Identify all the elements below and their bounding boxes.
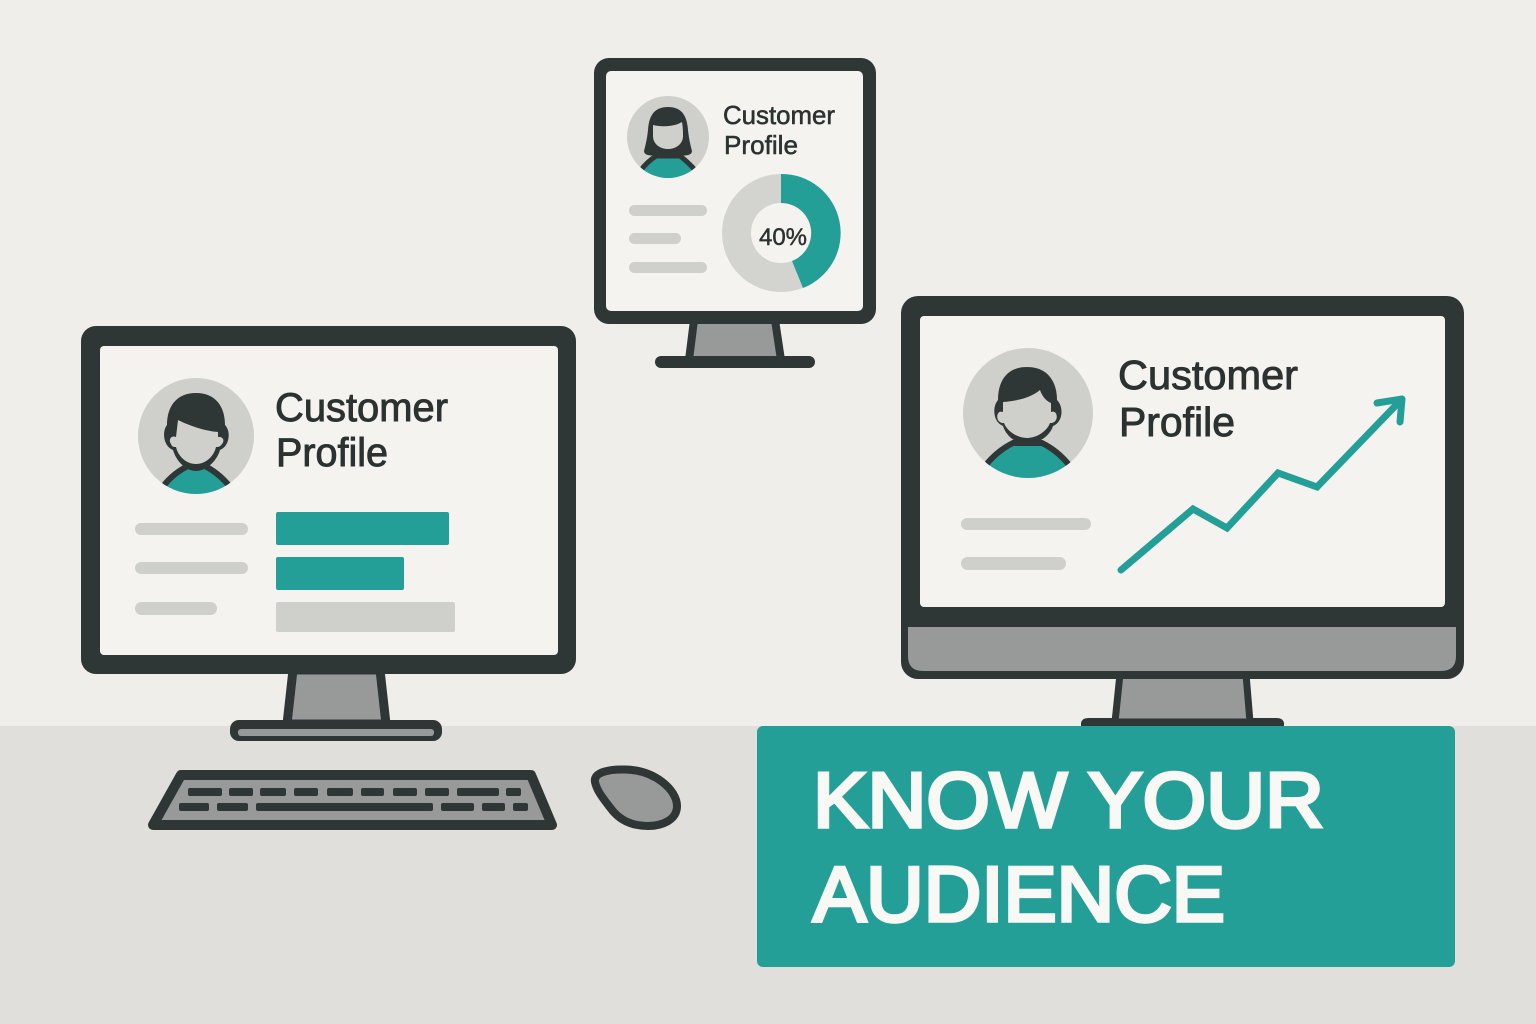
- monitor frame: [81, 326, 576, 674]
- desk surface: [0, 726, 1536, 1024]
- avatar: customer: [963, 348, 1093, 482]
- monitor chin: [908, 627, 1456, 671]
- heading: customer profile: Profile: [724, 130, 798, 160]
- text placeholder lines: [629, 205, 707, 273]
- donut chart: 40%: 40%: [759, 224, 807, 251]
- monitor screen: [100, 346, 558, 655]
- heading: customer profile: Profile: [1119, 399, 1235, 445]
- title text: KNOW YOUR: [813, 756, 1324, 844]
- heading: customer profile: [1118, 352, 1298, 445]
- right monitor: [901, 296, 1464, 726]
- heading: customer profile: [275, 386, 448, 475]
- avatar: customer: [138, 378, 254, 496]
- monitor frame: [901, 296, 1464, 679]
- monitor frame: [594, 58, 876, 324]
- keyboard: [153, 775, 552, 825]
- line chart with arrow: [1121, 399, 1402, 570]
- monitor stand: [1081, 674, 1284, 726]
- heading: customer profile: Customer: [275, 386, 448, 430]
- heading: customer profile: Customer: [723, 100, 835, 130]
- background wall: [0, 0, 1536, 726]
- heading: customer profile: Profile: [276, 431, 388, 475]
- monitor screen: [920, 316, 1445, 607]
- mouse: [595, 769, 677, 826]
- monitor stand: [230, 670, 442, 741]
- bar chart: [276, 512, 455, 632]
- heading: customer profile: [723, 100, 835, 160]
- left monitor: [81, 326, 576, 741]
- donut chart: 40%: [736, 174, 841, 288]
- avatar: customer: [627, 96, 709, 180]
- text placeholder lines: [135, 523, 248, 615]
- title text: [813, 756, 1324, 938]
- title banner: [757, 726, 1455, 967]
- top monitor: [594, 58, 876, 368]
- text placeholder lines: [961, 518, 1091, 570]
- monitor stand: [655, 320, 815, 368]
- title text: AUDIENCE: [813, 850, 1225, 938]
- heading: customer profile: Customer: [1118, 352, 1298, 398]
- monitor screen: [606, 71, 863, 311]
